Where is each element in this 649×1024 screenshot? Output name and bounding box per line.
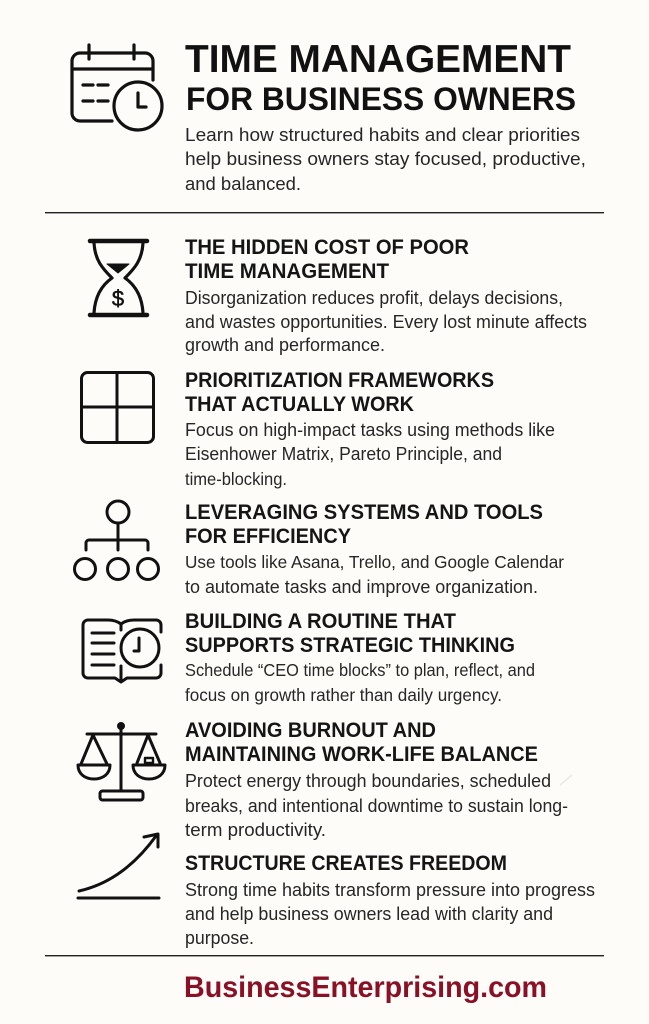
panel: systems and tools xyxy=(74,501,564,597)
body text: focus on growth rather than daily urgency. xyxy=(185,685,502,705)
title: TIME MANAGEMENT xyxy=(185,38,571,81)
heading: SUPPORTS STRATEGIC THINKING xyxy=(185,634,515,657)
body text xyxy=(185,420,555,489)
panel: structure creates freedom xyxy=(78,834,595,948)
panel: burnout xyxy=(78,719,568,840)
panel: routine xyxy=(83,610,535,705)
body text xyxy=(185,880,595,948)
body text: Schedule “CEO time blocks” to plan, reflect, and xyxy=(185,660,535,680)
intro text: Learn how structured habits and clear priorities xyxy=(185,125,580,145)
heading xyxy=(185,501,543,548)
heading xyxy=(185,236,469,283)
panel: hidden cost xyxy=(90,236,587,355)
heading xyxy=(185,610,515,657)
heading: TIME MANAGEMENT xyxy=(185,260,389,283)
heading: FOR EFFICIENCY xyxy=(185,525,351,548)
heading: MAINTAINING WORK-LIFE BALANCE xyxy=(185,743,538,766)
icon: hourglass with dollar xyxy=(90,241,147,315)
body text: Focus on high-impact tasks using methods like xyxy=(185,420,555,440)
icon: four-quadrant matrix xyxy=(82,372,154,442)
heading: LEVERAGING SYSTEMS AND TOOLS xyxy=(185,501,543,524)
intro text: and balanced. xyxy=(185,174,301,194)
body text: Strong time habits transform pressure into progress xyxy=(185,880,595,900)
icon: calendar with clock xyxy=(72,45,162,130)
panel: prioritization xyxy=(82,369,555,489)
icon: hourglass with dollar: $ xyxy=(112,286,124,311)
body text: and wastes opportunities. Every lost minute affects xyxy=(185,312,587,332)
body text: to automate tasks and improve organization. xyxy=(185,577,538,597)
body text: purpose. xyxy=(185,928,254,948)
icon: rising arrow xyxy=(78,834,159,898)
body text xyxy=(185,771,568,840)
body text: term productivity. xyxy=(185,820,326,840)
heading xyxy=(185,369,494,416)
body text: Protect energy through boundaries, scheduled xyxy=(185,771,551,791)
body text: Eisenhower Matrix, Pareto Principle, and xyxy=(185,444,502,464)
icon: balance scales xyxy=(78,724,165,800)
intro text xyxy=(185,125,586,194)
heading: STRUCTURE CREATES FREEDOM xyxy=(185,852,507,875)
body text xyxy=(185,288,587,355)
body text: Disorganization reduces profit, delays decisions, xyxy=(185,288,563,308)
body text xyxy=(185,552,564,597)
title xyxy=(185,38,576,117)
icon: book with clock xyxy=(83,620,161,682)
body text: growth and performance. xyxy=(185,335,385,355)
body text: and help business owners lead with clarity and xyxy=(185,904,553,924)
icon: org chart xyxy=(74,501,158,580)
body text: breaks, and intentional downtime to sustain long- xyxy=(185,796,568,816)
heading: THE HIDDEN COST OF POOR xyxy=(185,236,469,259)
footer website: BusinessEnterprising.com xyxy=(184,971,547,1004)
heading xyxy=(185,719,538,766)
title: FOR BUSINESS OWNERS xyxy=(186,81,576,117)
intro text: help business owners stay focused, productive, xyxy=(185,149,586,169)
body text xyxy=(185,660,535,705)
body text: time-blocking. xyxy=(185,469,287,489)
heading: PRIORITIZATION FRAMEWORKS xyxy=(185,369,494,392)
body text: Use tools like Asana, Trello, and Google Calendar xyxy=(185,552,564,572)
heading: THAT ACTUALLY WORK xyxy=(185,393,414,416)
heading: AVOIDING BURNOUT AND xyxy=(185,719,436,742)
heading: BUILDING A ROUTINE THAT xyxy=(185,610,456,633)
